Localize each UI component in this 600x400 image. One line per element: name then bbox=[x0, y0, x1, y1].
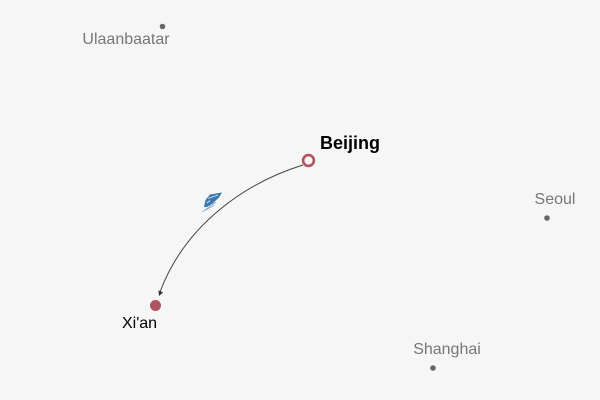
icon: high speed train bbox=[202, 192, 222, 212]
city: Beijing (origin) bbox=[303, 133, 380, 166]
city: Shanghai: Shanghai bbox=[413, 341, 481, 358]
city: Seoul: Seoul bbox=[535, 191, 575, 208]
route arrow: Beijing to Xi'an bbox=[158, 165, 303, 296]
city: Beijing (origin): Beijing bbox=[320, 133, 380, 153]
city: Seoul bbox=[535, 191, 575, 221]
city: Ulaanbaatar bbox=[82, 24, 170, 48]
city: Xi'an (destination): Xi'an bbox=[122, 315, 157, 332]
city: Shanghai bbox=[413, 341, 481, 371]
city: Ulaanbaatar: Ulaanbaatar bbox=[82, 31, 170, 48]
city: Xi'an (destination) bbox=[122, 300, 161, 332]
